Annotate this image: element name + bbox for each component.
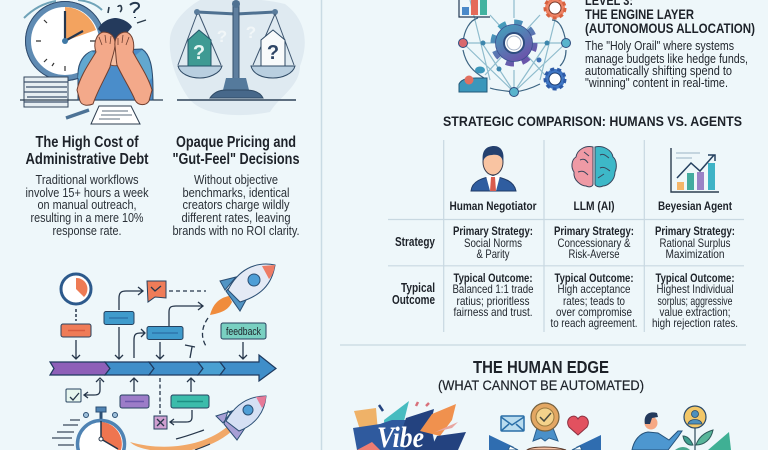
timeline with arrows and task cards xyxy=(50,264,276,450)
row: strategy cells: Primary Strategy: xyxy=(453,224,533,238)
rocket upper xyxy=(210,264,275,315)
column headers: Beyesian Agent xyxy=(658,199,732,213)
text: administrative debt description: on manual outreach, xyxy=(38,198,136,212)
row: outcome cells: rates; teads to xyxy=(563,294,625,308)
icon: person with growing plant xyxy=(632,406,731,450)
row: outcome cells xyxy=(452,271,738,330)
heading: administrative debt: Administrative Debt xyxy=(26,151,148,168)
heading: administrative debt: The High Cost of xyxy=(36,134,139,151)
row label: typical outcome xyxy=(392,281,435,307)
row: outcome cells: High acceptance xyxy=(558,282,631,296)
row: outcome cells: value extraction; xyxy=(660,305,730,319)
row: outcome cells: sorplus; aggressive xyxy=(658,294,733,308)
icon: network with central gear xyxy=(458,0,570,96)
text: opaque pricing description: Without objective xyxy=(194,173,278,187)
text: opaque pricing description: different rates, leaving xyxy=(182,211,291,225)
text: opaque pricing description: brands with no ROI clarity. xyxy=(172,224,300,238)
icon: vibe paint splash xyxy=(353,401,466,450)
heading: the human edge: THE HUMAN EDGE xyxy=(473,357,609,377)
icon: balance scale with price tags: ? xyxy=(217,27,227,46)
icon: envelope, award badge and heart over handshake xyxy=(489,403,601,450)
column headers xyxy=(450,199,732,213)
row: strategy cells: Risk-Averse xyxy=(568,247,620,261)
icon: llm brain xyxy=(572,147,616,187)
text: administrative debt description: involve 15+ hours a week xyxy=(26,186,149,200)
row: strategy cells: Primary Strategy: xyxy=(655,224,735,238)
row: strategy cells xyxy=(453,224,735,261)
text: opaque pricing description: creators charge wildly xyxy=(182,198,290,212)
row: strategy cells: Social Norms xyxy=(464,236,522,250)
row: outcome cells: Balanced 1:1 trade xyxy=(452,282,534,296)
text: level 3 engine layer xyxy=(585,0,755,90)
row: strategy cells: Concessionary & xyxy=(558,236,630,250)
column headers: LLM (AI) xyxy=(574,199,615,213)
rocket lower with flame trail xyxy=(130,396,266,450)
text: opaque pricing description: benchmarks, identical xyxy=(182,186,290,200)
row: outcome cells: Typical Outcome: xyxy=(656,271,734,285)
row: outcome cells: ratius; prioritless xyxy=(456,294,530,308)
icon: balance scale with price tags: ? xyxy=(246,23,256,42)
row: outcome cells: Typical Outcome: xyxy=(454,271,532,285)
comparison table xyxy=(388,140,744,332)
heading: the human edge xyxy=(438,357,644,393)
row: strategy cells: Rational Surplus xyxy=(660,236,730,250)
icon: balance scale with price tags xyxy=(170,0,305,115)
row label: strategy: Strategy xyxy=(395,235,435,249)
icon: balance scale with price tags: ? xyxy=(193,42,205,64)
row: outcome cells: Highest Individual xyxy=(656,282,734,296)
row: strategy cells: Maximization xyxy=(666,247,724,261)
row label: typical outcome: Outcome xyxy=(392,293,435,307)
text: level 3 engine layer: THE ENGINE LAYER xyxy=(585,6,694,22)
row: outcome cells: to reach agreement. xyxy=(550,316,638,330)
connector arrows xyxy=(70,286,247,426)
heading: opaque pricing: "Gut-Feel" Decisions xyxy=(172,151,300,168)
text: level 3 engine layer: The "Holy Orail" where systems xyxy=(585,39,734,53)
icon: bayesian agent chart xyxy=(671,148,719,192)
heading: opaque pricing: Opaque Pricing and xyxy=(176,134,296,151)
row: outcome cells: fairness and trust. xyxy=(454,305,532,319)
row: outcome cells: over compromise xyxy=(556,305,632,319)
heading: administrative debt xyxy=(26,134,148,168)
text: level 3 engine layer: automatically shifting spend to xyxy=(585,64,732,78)
text: administrative debt description xyxy=(26,173,149,238)
icon: clock and stressed worker xyxy=(20,0,163,124)
card bars xyxy=(68,318,203,402)
feedback label: feedback xyxy=(226,326,261,338)
heading: opaque pricing xyxy=(172,134,300,168)
icon: human negotiator xyxy=(471,146,516,191)
row: strategy cells: Primary Strategy: xyxy=(554,224,634,238)
text: administrative debt description: Traditional workflows xyxy=(36,173,138,187)
icon: balance scale with price tags: ? xyxy=(267,42,279,64)
column headers: Human Negotiator xyxy=(450,199,537,213)
heading: the human edge: (WHAT CANNOT BE AUTOMATED) xyxy=(438,377,644,393)
row label: typical outcome: Typical xyxy=(401,281,435,295)
stopwatch icon xyxy=(52,407,124,450)
row: outcome cells: high rejection rates. xyxy=(652,316,738,330)
text: level 3 engine layer: "winning" content in real-time. xyxy=(585,76,728,90)
clock icon xyxy=(61,274,91,321)
text: administrative debt description: response rate. xyxy=(52,224,122,238)
row: strategy cells: & Parity xyxy=(476,247,510,261)
task cards xyxy=(61,281,266,429)
text: administrative debt description: resulting in a mere 10% xyxy=(30,211,144,225)
row: outcome cells: Typical Outcome: xyxy=(554,271,634,285)
text: opaque pricing description xyxy=(172,173,300,238)
timeline arrow bar xyxy=(50,355,276,381)
